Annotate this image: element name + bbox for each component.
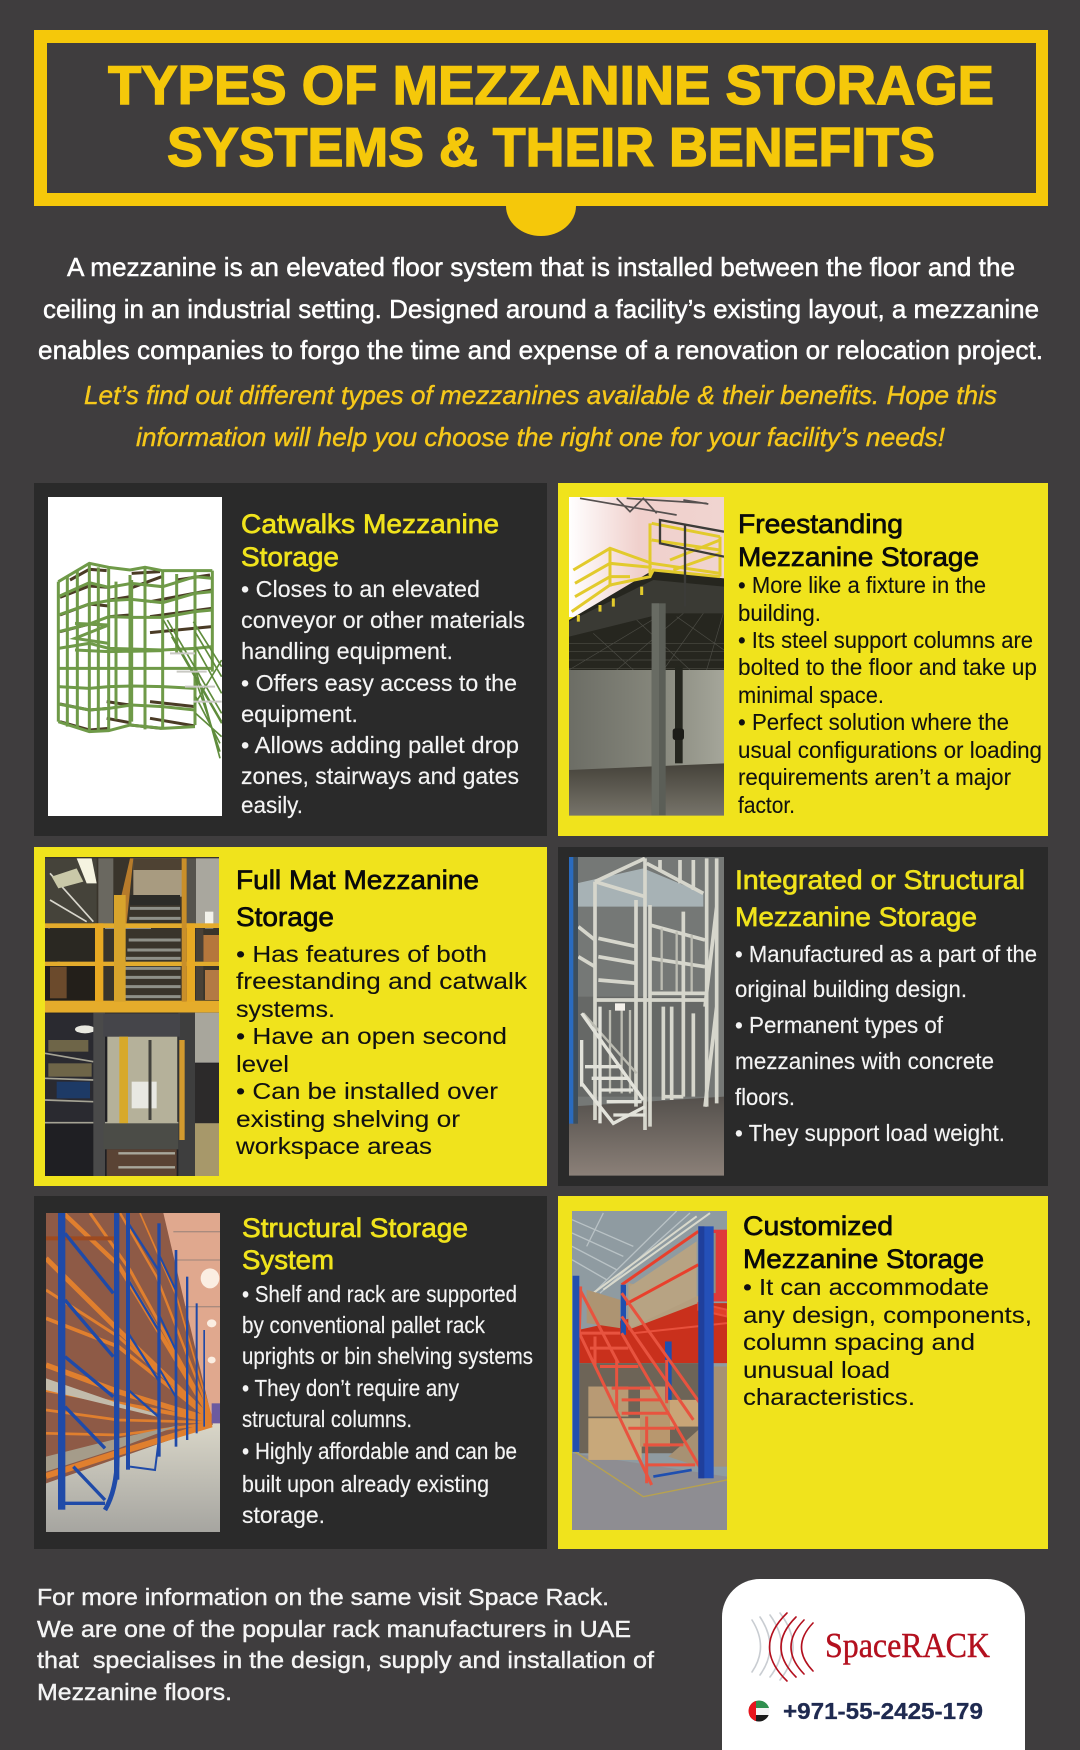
bullet list: floors.	[735, 1084, 795, 1110]
bullet list: existing shelving or	[236, 1106, 460, 1132]
bullet list	[242, 1281, 533, 1528]
image: full mat mezzanine photo	[45, 857, 219, 1176]
heading: Storage	[241, 542, 339, 572]
image: freestanding mezzanine photo	[569, 497, 724, 816]
bullet list: conveyor or other materials	[241, 607, 525, 633]
bullet list: • They support load weight.	[735, 1120, 1005, 1146]
title banner: SYSTEMS & THEIR BENEFITS	[167, 116, 935, 178]
heading: System	[242, 1245, 334, 1275]
bullet list: zones, stairways and gates	[241, 763, 519, 789]
bullet list: characteristics.	[743, 1384, 915, 1410]
bullet list: • Can be installed over	[236, 1078, 498, 1104]
bullet list: column spacing and	[743, 1329, 975, 1355]
heading: Integrated or Structural	[735, 865, 1025, 895]
bullet list: systems.	[236, 996, 335, 1022]
footer text: that specialises in the design, supply and installation of	[37, 1647, 655, 1673]
bullet list: • Allows adding pallet drop	[241, 732, 519, 758]
heading	[735, 865, 1025, 932]
panel: integrated or structural mezzanine	[558, 847, 1048, 1186]
footer text: We are one of the popular rack manufacturers in UAE	[37, 1616, 631, 1642]
bullet list: factor.	[738, 792, 795, 818]
icon: spacerack logo arcs	[752, 1613, 813, 1681]
heading	[743, 1211, 984, 1274]
logo card	[722, 1579, 1025, 1750]
panel: structural storage system	[34, 1196, 547, 1549]
heading	[242, 1213, 468, 1275]
bullet list: by conventional pallet rack	[242, 1312, 485, 1338]
bullet list: level	[236, 1051, 289, 1077]
bullet list: original building design.	[735, 976, 967, 1002]
image: catwalk structure	[48, 497, 222, 816]
bullet list: • Permanent types of	[735, 1012, 944, 1038]
heading: Mezzanine Storage	[735, 902, 977, 932]
heading: Mezzanine Storage	[738, 542, 979, 572]
panel: freestanding mezzanine	[558, 483, 1048, 836]
heading: Storage	[236, 902, 334, 932]
bullet list: • Its steel support columns are	[738, 627, 1033, 653]
bullet list: workspace areas	[235, 1133, 432, 1159]
bullet list: • They don’t require any	[242, 1375, 459, 1401]
bullet list	[735, 941, 1037, 1146]
bullet list: storage.	[242, 1502, 325, 1528]
bullet list: structural columns.	[242, 1406, 412, 1432]
panel: customized mezzanine	[558, 1196, 1048, 1549]
bullet list: • Have an open second	[236, 1023, 507, 1049]
bullet list: building.	[738, 600, 821, 626]
bullet list: • Manufactured as a part of the	[735, 941, 1037, 967]
panel: full mat mezzanine	[34, 847, 547, 1186]
heading: Structural Storage	[242, 1213, 468, 1243]
bullet list: bolted to the floor and take up	[738, 654, 1037, 680]
italic call to action: Let’s find out different types of mezzanines available & their benefits. Hope this	[84, 380, 997, 410]
footer text: Mezzanine floors.	[37, 1679, 232, 1705]
heading: Full Mat Mezzanine	[236, 865, 479, 895]
intro paragraph: enables companies to forgo the time and expense of a renovation or relocation project.	[38, 335, 1043, 365]
italic call to action: information will help you choose the right one for your facility’s needs!	[136, 422, 945, 452]
bullet list: • Offers easy access to the	[241, 670, 517, 696]
heading	[738, 509, 979, 572]
bullet list: • It can accommodate	[743, 1274, 989, 1300]
bullet list: minimal space.	[738, 682, 884, 708]
phone number: +971-55-2425-179	[783, 1698, 983, 1724]
bullet list: built upon already existing	[242, 1471, 489, 1497]
bullet list: • Highly affordable and can be	[242, 1438, 517, 1464]
icon: uae flag	[748, 1700, 770, 1722]
bullet list: easily.	[241, 792, 303, 818]
bullet list	[738, 572, 1042, 818]
bullet list: • Shelf and rack are supported	[242, 1281, 517, 1307]
bullet list: mezzanines with concrete	[735, 1048, 994, 1074]
bullet list	[235, 941, 528, 1159]
footer text: For more information on the same visit Space Rack.	[37, 1584, 609, 1610]
intro paragraph: A mezzanine is an elevated floor system that is installed between the floor and the	[67, 252, 1015, 282]
title banner: TYPES OF MEZZANINE STORAGE	[108, 54, 994, 116]
bullet list: any design, components,	[743, 1302, 1032, 1328]
heading: Customized	[743, 1211, 893, 1241]
heading	[236, 865, 479, 932]
image: structural storage photo	[46, 1213, 220, 1532]
heading: Catwalks Mezzanine	[241, 509, 499, 539]
italic call to action	[84, 380, 997, 452]
heading: Mezzanine Storage	[743, 1244, 984, 1274]
panel: catwalks mezzanine	[34, 483, 547, 836]
bullet list: equipment.	[241, 701, 358, 727]
intro paragraph	[38, 252, 1043, 365]
bullet list: freestanding and catwalk	[236, 968, 528, 994]
bullet list	[241, 576, 525, 818]
logo wordmark: SpaceRACK	[825, 1626, 990, 1665]
bullet list: • Perfect solution where the	[738, 709, 1009, 735]
image: customized mezzanine photo	[572, 1211, 727, 1530]
heading	[241, 509, 499, 572]
bullet list: usual configurations or loading	[738, 737, 1042, 763]
bullet list: unusual load	[743, 1357, 890, 1383]
title banner	[34, 30, 1048, 236]
image: integrated mezzanine photo	[569, 857, 724, 1176]
bullet list: requirements aren’t a major	[738, 764, 1011, 790]
heading: Freestanding	[738, 509, 903, 539]
bullet list	[743, 1274, 1032, 1410]
bullet list: uprights or bin shelving systems	[242, 1343, 533, 1369]
intro paragraph: ceiling in an industrial setting. Designed around a facility’s existing layout, a mezzanine	[43, 294, 1039, 324]
bullet list: handling equipment.	[241, 638, 453, 664]
footer text	[37, 1584, 655, 1705]
bullet list: • Closes to an elevated	[241, 576, 480, 602]
bullet list: • Has features of both	[236, 941, 487, 967]
bullet list: • More like a fixture in the	[738, 572, 986, 598]
